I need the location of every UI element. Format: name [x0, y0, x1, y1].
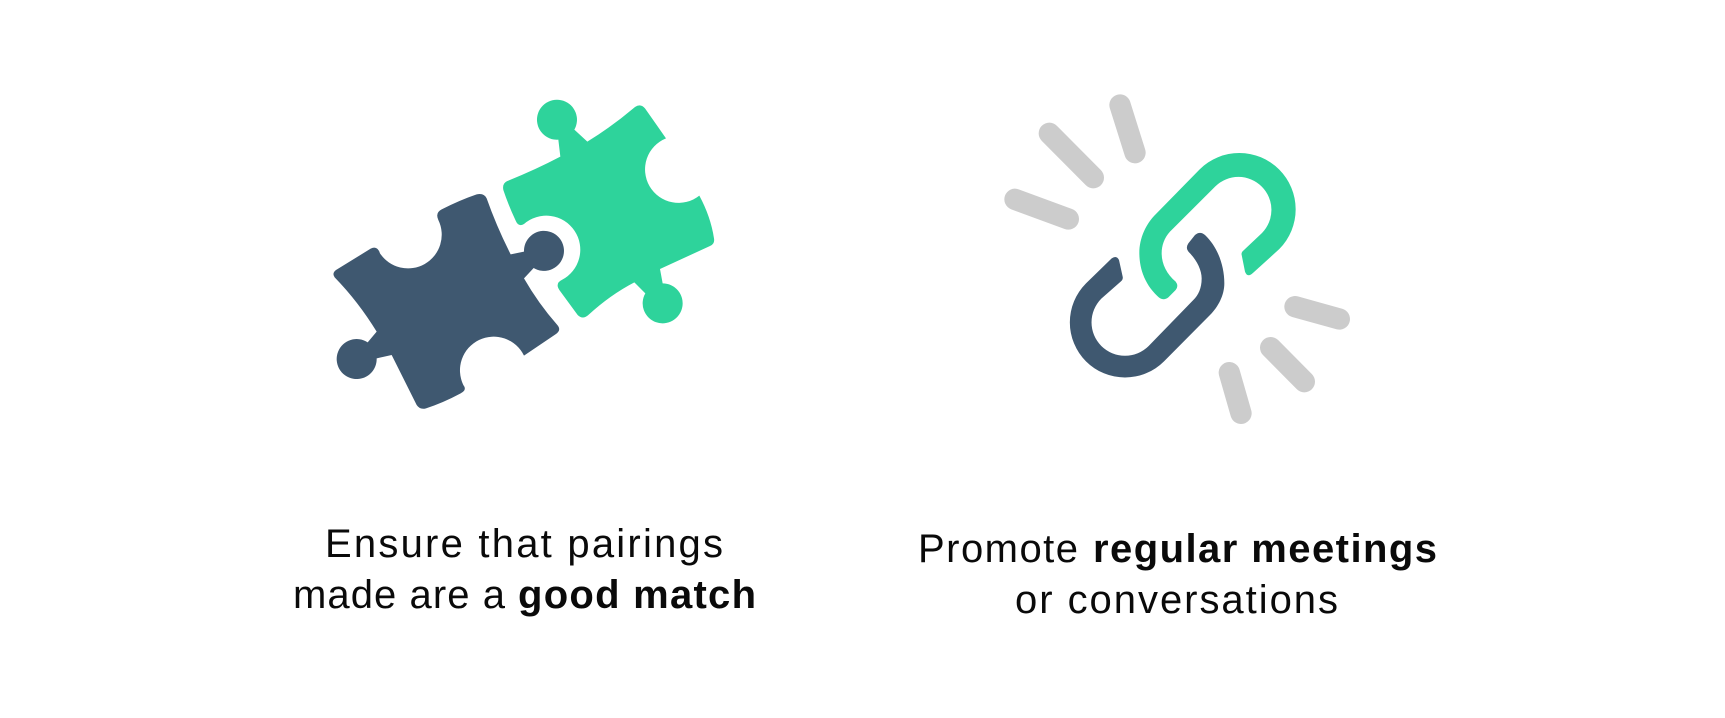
- green puzzle piece: [503, 100, 714, 323]
- spark: lower right: [1271, 348, 1304, 382]
- caption: good match: good match: [518, 573, 756, 617]
- blue puzzle piece: [333, 194, 564, 409]
- spark: right: [1295, 307, 1339, 319]
- caption: regular meetings: [918, 527, 1437, 622]
- blue link half: [1070, 233, 1224, 377]
- caption: good match: made are a: [293, 573, 506, 617]
- caption: good match: [293, 522, 756, 617]
- caption: regular meetings: Promote: [918, 527, 1078, 571]
- spark: left: [1015, 199, 1068, 219]
- green link half: [1139, 153, 1296, 299]
- spark: top: [1120, 105, 1135, 153]
- icon: broken chain link: [1015, 105, 1339, 413]
- caption: regular meetings: regular meetings: [1093, 527, 1437, 571]
- caption: good match: Ensure that pairings: [325, 522, 723, 566]
- spark: upper left: [1049, 133, 1093, 178]
- caption: regular meetings: or conversations: [1015, 578, 1338, 622]
- icon: puzzle pieces: [333, 100, 714, 409]
- spark: bottom: [1229, 373, 1241, 413]
